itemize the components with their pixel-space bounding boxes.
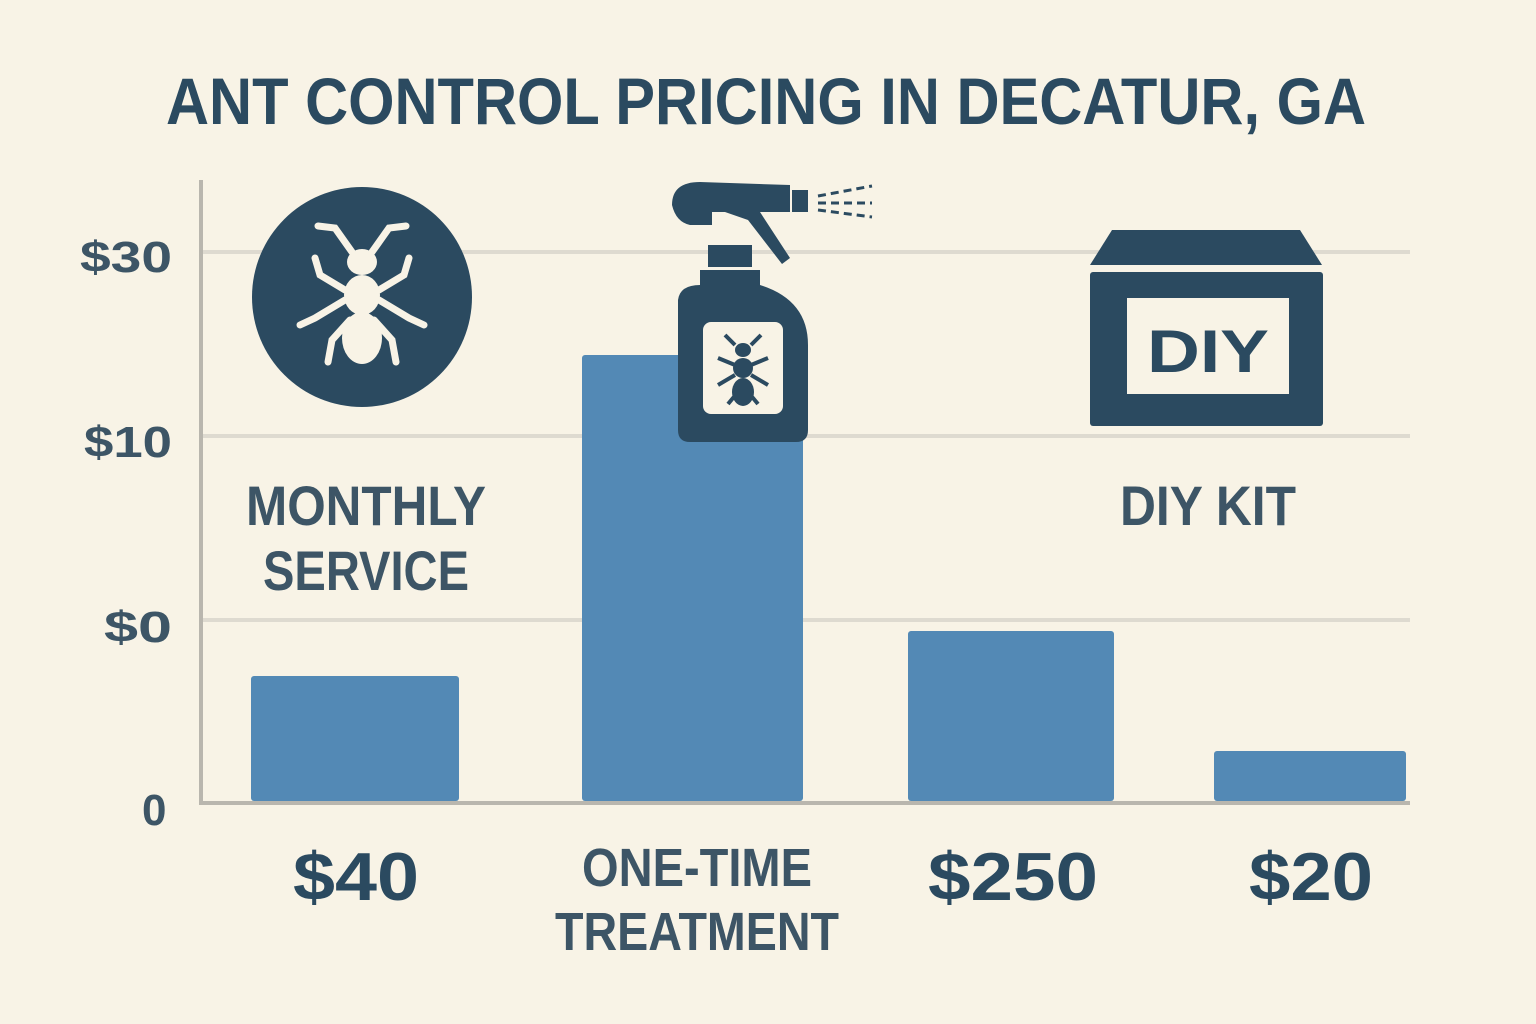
icon: DIY box: DIY <box>1147 318 1269 385</box>
axes <box>199 180 1410 805</box>
bottom labels: $250 <box>928 839 1098 915</box>
label: one-time treatment: ONE-TIME <box>582 838 812 898</box>
label: one-time treatment: TREATMENT <box>555 902 839 962</box>
icon: spray bottle <box>672 182 872 442</box>
y axis labels: $0 <box>104 603 172 652</box>
label: monthly service <box>246 474 486 602</box>
icon: DIY box <box>1090 230 1323 426</box>
label: one-time treatment <box>555 838 839 962</box>
bottom labels <box>293 839 1373 915</box>
y axis labels: $30 <box>80 233 172 282</box>
label: DIY kit: DIY KIT <box>1120 474 1296 537</box>
y axis labels <box>80 233 172 835</box>
bottom labels: $20 <box>1249 839 1373 915</box>
y axis labels: $10 <box>84 418 172 467</box>
label: monthly service: SERVICE <box>263 539 469 602</box>
icon: ant in circle <box>252 187 472 407</box>
bottom labels: $40 <box>293 839 419 915</box>
bar chart <box>251 355 1406 801</box>
y axis labels: 0 <box>142 786 166 835</box>
title: ANT CONTROL PRICING IN DECATUR, GA <box>166 64 1366 138</box>
label: monthly service: MONTHLY <box>246 474 486 537</box>
